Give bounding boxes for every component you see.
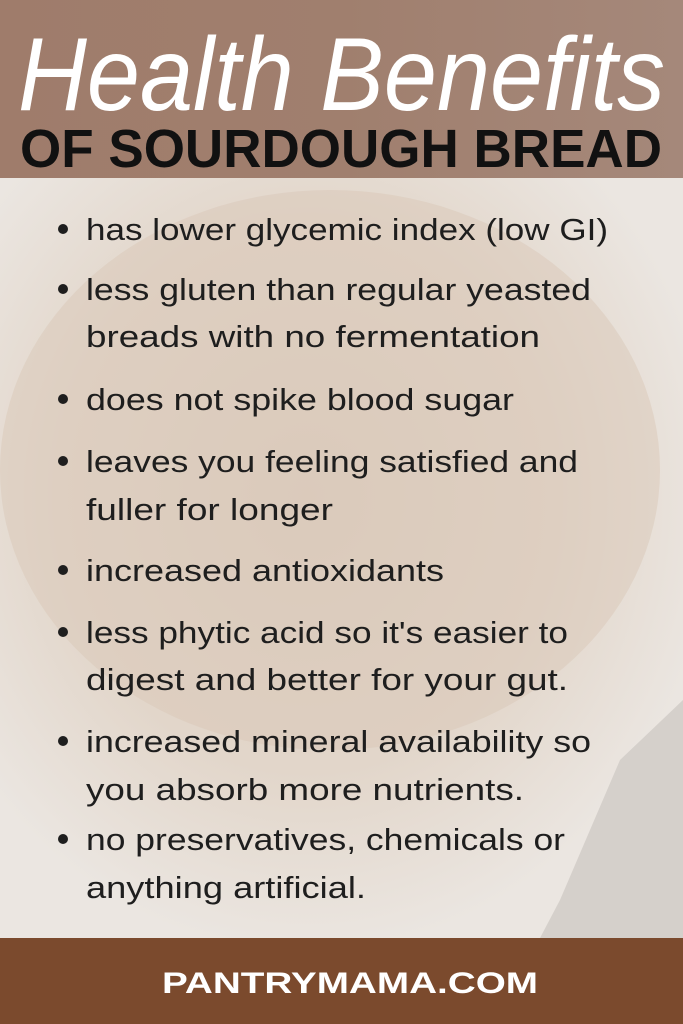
- item 1: has lower glycemic index (low GI): [86, 212, 608, 247]
- benefits list: [58, 212, 608, 905]
- item 8: [58, 822, 565, 905]
- item 8: no preservatives, chemicals or: [86, 822, 565, 857]
- subtitle: OF SOURDOUGH BREAD: [20, 119, 662, 179]
- item 4: fuller for longer: [86, 492, 333, 527]
- item 2: less gluten than regular yeasted: [86, 272, 591, 307]
- item 7: you absorb more nutrients.: [86, 772, 524, 807]
- item 6: [58, 615, 568, 697]
- item 2: [58, 272, 591, 354]
- item 3: does not spike blood sugar: [86, 382, 514, 417]
- item 8: anything artificial.: [86, 870, 366, 905]
- item 6: less phytic acid so it's easier to: [86, 615, 568, 650]
- item 2: breads with no fermentation: [86, 319, 540, 354]
- body background: faded bread photo: [0, 178, 683, 938]
- item 7: increased mineral availability so: [86, 724, 591, 759]
- footer band: [0, 938, 683, 1024]
- footer url: PANTRYMAMA.COM: [162, 967, 538, 1000]
- item 4: leaves you feeling satisfied and: [86, 444, 578, 479]
- header band: [0, 0, 683, 179]
- item 6: digest and better for your gut.: [86, 662, 568, 697]
- item 4: [58, 444, 578, 527]
- item 7: [58, 724, 591, 807]
- item 5: increased antioxidants: [86, 553, 444, 588]
